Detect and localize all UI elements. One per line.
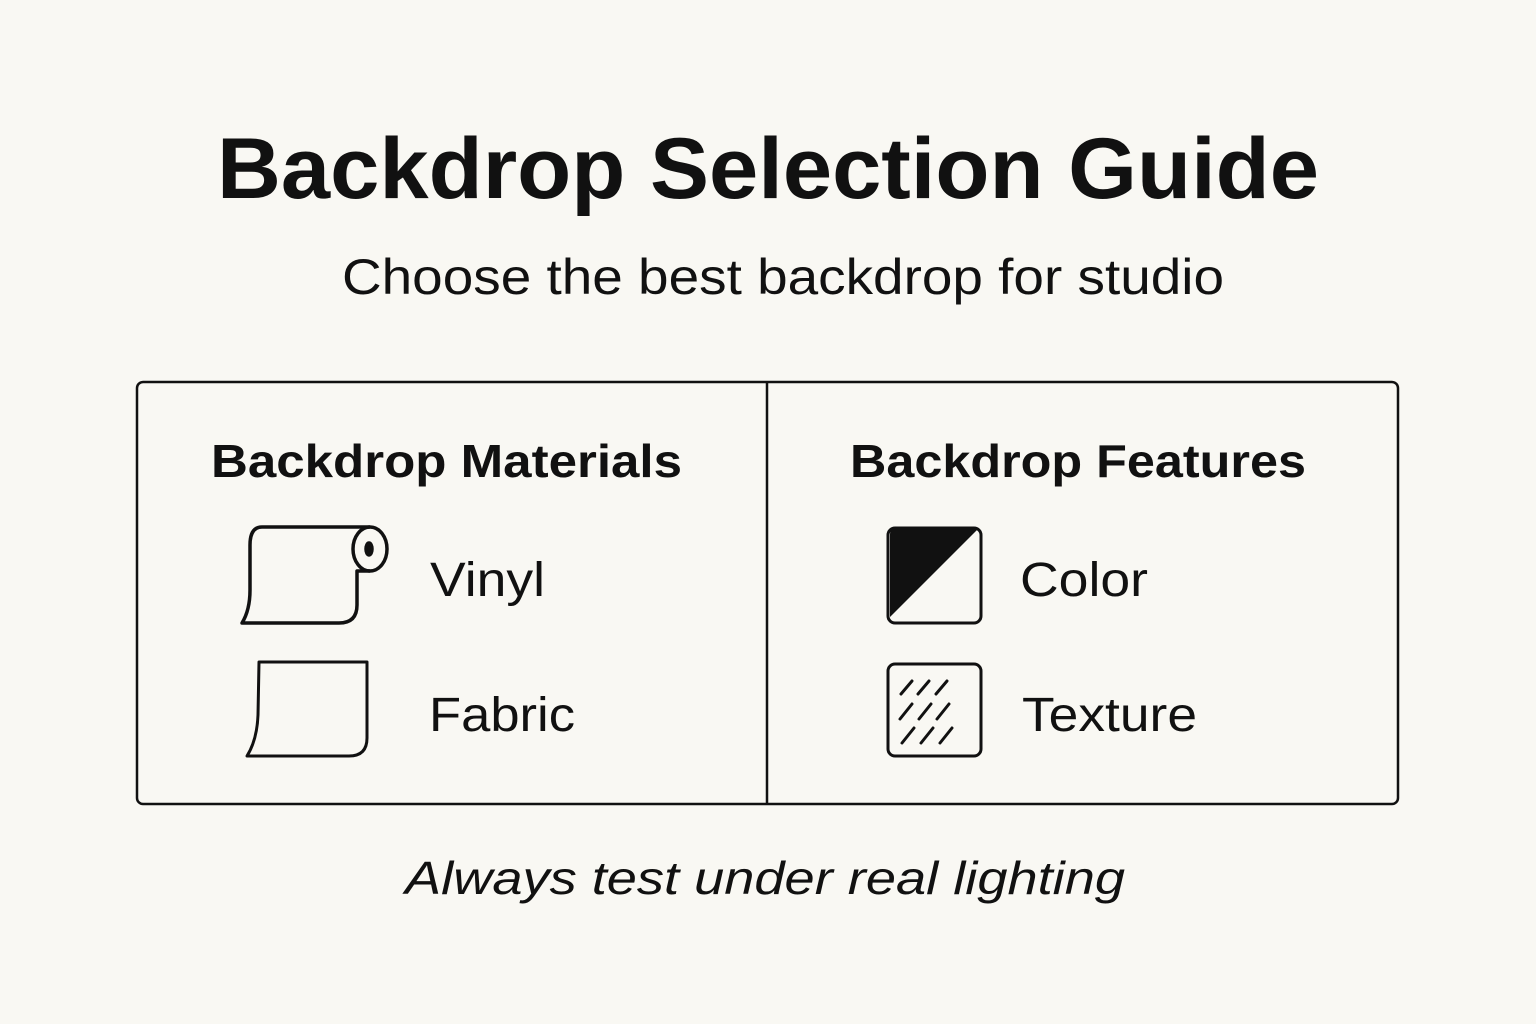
title: Backdrop Selection Guide [217, 121, 1319, 217]
label: color: Color [1020, 554, 1148, 607]
icon: texture [888, 664, 981, 756]
label: fabric: Fabric [429, 689, 575, 742]
panel: features [850, 435, 1306, 756]
panel: main box [137, 382, 1398, 804]
label: vinyl: Vinyl [430, 554, 545, 607]
panel: materials [211, 435, 682, 756]
footer note: Always test under real lighting [401, 852, 1125, 904]
label: texture: Texture [1022, 689, 1197, 742]
subtitle: Choose the best backdrop for studio [342, 249, 1224, 305]
icon: color [888, 528, 981, 623]
heading: materials: Backdrop Materials [211, 435, 682, 487]
heading: features: Backdrop Features [850, 435, 1306, 487]
icon: vinyl roll [242, 527, 387, 623]
icon: fabric [247, 662, 367, 756]
